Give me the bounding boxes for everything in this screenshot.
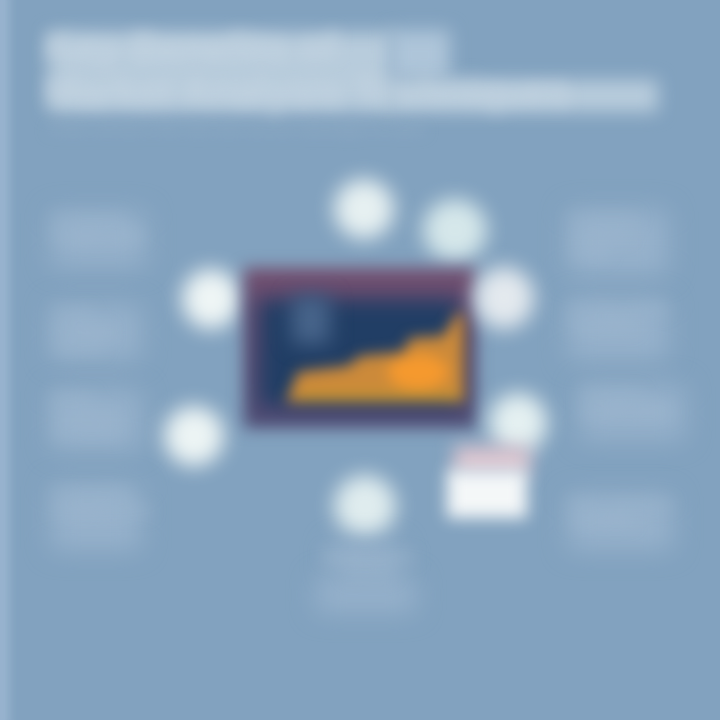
right column text: Risk reduction overview	[568, 495, 672, 529]
left column text: Competitor research view	[51, 485, 150, 519]
right column text: Customer segment study	[568, 210, 638, 261]
right column text: Revenue growth plans	[580, 385, 673, 419]
small card with red header	[436, 434, 541, 529]
icon: circle left upper	[182, 269, 240, 329]
title: Market Analysis Techniques	[46, 70, 569, 114]
left column text: Trend tracking reports	[51, 305, 109, 356]
central dashboard screen	[232, 256, 486, 438]
icon: circle top centre	[334, 179, 394, 239]
left column text: Better business decisions	[51, 390, 120, 441]
right column text	[563, 206, 688, 553]
screen interior	[260, 300, 460, 406]
area chart	[279, 306, 474, 412]
icon: circle right lower	[489, 393, 547, 453]
right column text: Pricing model forecasts	[568, 300, 667, 334]
left edge strip	[0, 0, 9, 720]
icon: circle right upper	[474, 267, 534, 329]
screen frame	[244, 268, 476, 428]
subtitle: A short overview of the main tools and their advantages for teams	[48, 122, 425, 137]
left column text: Consumer insights data	[51, 210, 144, 244]
icon: circle left lower	[164, 406, 224, 466]
left column text	[46, 207, 150, 553]
icon: circle top right	[423, 199, 487, 261]
bottom centre label	[316, 534, 416, 615]
title	[37, 22, 666, 122]
highlighted chart panel	[292, 296, 330, 344]
bottom centre label: Market share results	[324, 548, 416, 582]
icon: circle bottom centre	[334, 475, 396, 537]
title: Key Benefits of	[46, 26, 337, 70]
